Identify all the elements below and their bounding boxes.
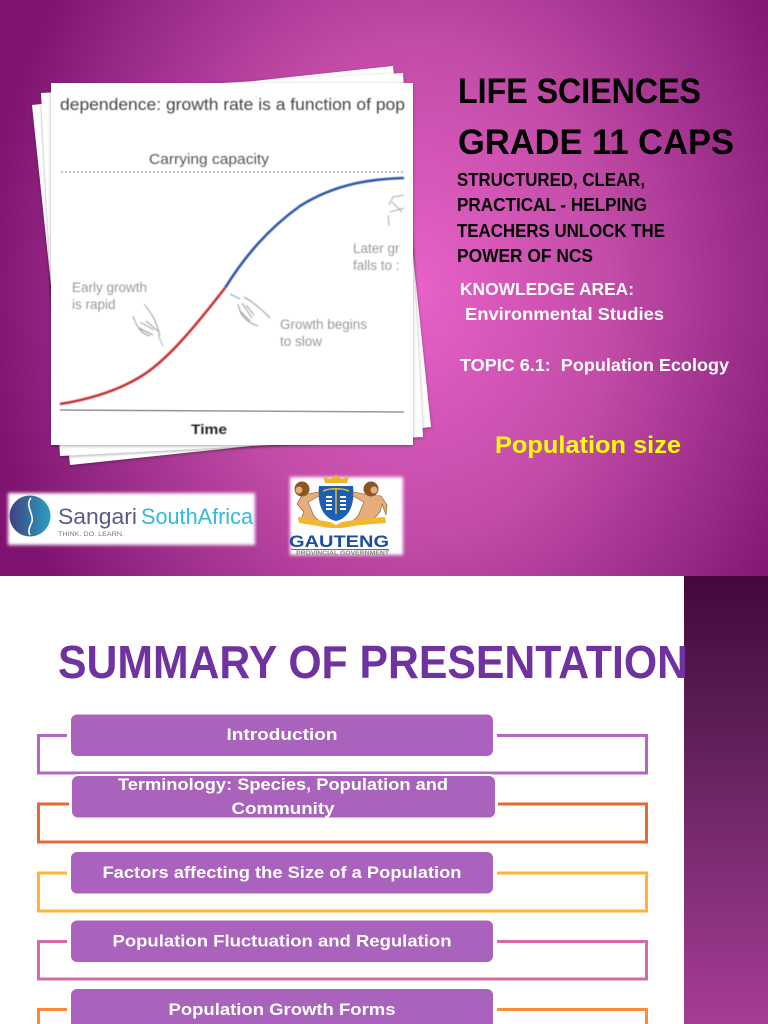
- knowledge area: KNOWLEDGE AREA:: [460, 279, 634, 299]
- annotation: growth begins to slow: to slow: [280, 334, 322, 349]
- knowledge area: [460, 279, 664, 324]
- decorative side strip: [684, 576, 768, 1024]
- crest: [294, 475, 387, 528]
- population size label: Population size: [495, 432, 681, 459]
- subtitle: POWER OF NCS: [457, 246, 593, 266]
- list item: Introduction: Introduction: [226, 725, 338, 744]
- annotation: later growth: Later gr: [353, 241, 400, 256]
- logo: Sangari South Africa: [8, 493, 255, 545]
- motto ribbon: [298, 517, 386, 528]
- list item: Growth Forms: Population Growth Forms: [168, 1000, 396, 1019]
- chart heading: dependence: growth rate is a function of pop: [60, 96, 405, 114]
- crown: [323, 475, 349, 483]
- list item: Factors: [38, 852, 646, 911]
- list item: Factors: Factors affecting the Size of a Population: [102, 863, 461, 882]
- logo: Sangari South Africa: SouthAfrica: [141, 504, 253, 529]
- logo wordmark: GAUTENG: [289, 532, 389, 551]
- annotation: later growth: falls to :: [353, 258, 400, 273]
- slide 1 background: [0, 0, 768, 576]
- icon: pointing hand early: [133, 304, 163, 346]
- logo wordmark: Sangari: [58, 504, 137, 529]
- logistic curve: early growth: [60, 288, 225, 404]
- axis label: Time: [191, 421, 227, 437]
- left lion: [297, 492, 319, 521]
- subtitle: TEACHERS UNLOCK THE: [457, 221, 665, 241]
- list item: Introduction: [38, 714, 646, 773]
- title: LIFE SCIENCES: [458, 72, 701, 111]
- topic: TOPIC 6.1: Population Ecology: [460, 355, 729, 375]
- carrying capacity line: [61, 171, 404, 173]
- logistic curve: later growth: [225, 178, 404, 288]
- right lion: [353, 492, 387, 521]
- list item: Terminology: [38, 774, 646, 842]
- annotation: growth begins to slow: Growth begins: [280, 317, 367, 332]
- slide 2 heading: SUMMARY OF PRESENTATION: [58, 636, 688, 688]
- list item: Terminology: Community: [232, 799, 335, 818]
- axis: [60, 410, 404, 412]
- stacked paper chart: [32, 66, 431, 465]
- list item: Fluctuation: [38, 920, 646, 979]
- shield: [319, 486, 353, 521]
- list item: Fluctuation: Population Fluctuation and Regulation: [112, 932, 452, 950]
- logo tagline: THINK. DO. LEARN.: [58, 531, 124, 538]
- knowledge area: Environmental Studies: [465, 304, 664, 324]
- logo mark: [10, 496, 50, 536]
- subtitle: [457, 170, 665, 266]
- logo tagline: PROVINCIAL GOVERNMENT: [296, 551, 389, 557]
- list item: Terminology: Terminology: Species, Population and: [118, 775, 448, 794]
- list item: Growth Forms: [38, 989, 646, 1024]
- title: GRADE 11 CAPS: [458, 123, 734, 162]
- slide 2 background: [0, 576, 768, 1024]
- subtitle: STRUCTURED, CLEAR,: [457, 170, 645, 190]
- logo: Gauteng: [289, 475, 403, 557]
- annotation: early growth: Early growth: [72, 280, 147, 295]
- subtitle: PRACTICAL - HELPING: [457, 195, 647, 215]
- title: [458, 72, 734, 162]
- annotation: early growth: is rapid: [72, 297, 116, 312]
- logo underline: [291, 548, 389, 550]
- icon: pointing hand later: [388, 195, 404, 226]
- carrying capacity label: Carrying capacity: [149, 152, 270, 168]
- icon: pointing hand slow: [230, 294, 270, 326]
